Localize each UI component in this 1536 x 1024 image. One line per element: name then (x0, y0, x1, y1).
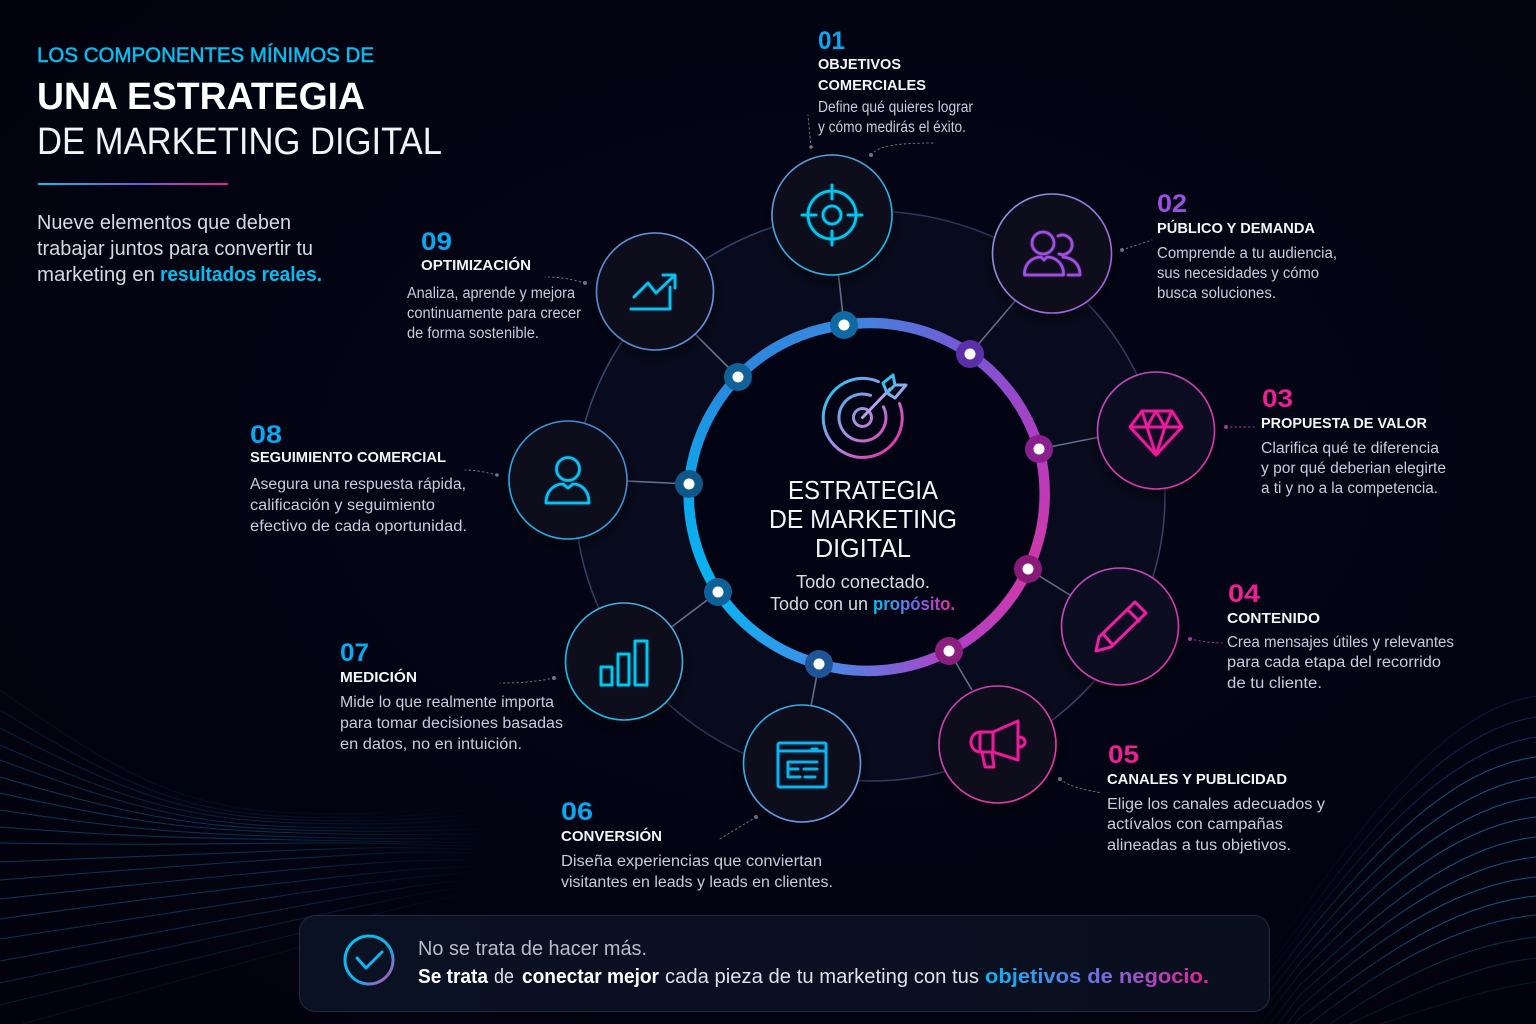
text block: 01: COMERCIALES (818, 77, 926, 94)
icon: check circle (345, 936, 393, 984)
text block: 05 (1107, 741, 1325, 854)
panel: 04 contenido icon (1062, 568, 1178, 685)
text block: 07: para tomar decisiones basadas (340, 715, 563, 732)
header: title block (37, 44, 442, 185)
panel: 06 conversion icon (744, 705, 860, 822)
icon: two users (1024, 232, 1080, 275)
text block: 04 (1227, 580, 1454, 692)
central hub text: DIGITAL (815, 533, 911, 563)
text block: 05: 05 (1108, 741, 1139, 769)
text block: 02: Comprende a tu audiencia, (1157, 245, 1337, 262)
text block: 08: SEGUIMIENTO COMERCIAL (250, 449, 446, 466)
text block: 05: alineadas a tus objetivos. (1107, 837, 1291, 854)
text block: 03: PROPUESTA DE VALOR (1261, 415, 1427, 432)
eyebrow heading: LOS COMPONENTES MÍNIMOS DE (37, 44, 374, 67)
text block: 07: 07 (340, 639, 369, 667)
callout text: cada pieza de tu marketing con tus (665, 966, 979, 988)
text block: 08: Asegura una respuesta rápida, (250, 476, 466, 493)
text block: 08: calificación y seguimiento (250, 497, 435, 514)
icon: pencil (1096, 602, 1146, 651)
panel: 03 propuesta de valor icon (1098, 372, 1214, 489)
text block: 01 (818, 27, 973, 136)
text block: 02: PÚBLICO Y DEMANDA (1157, 219, 1315, 237)
text block: 02: 02 (1157, 190, 1187, 218)
panel: 07 medicion icon (566, 603, 682, 720)
text block: 06: visitantes en leads y leads en clientes. (561, 874, 833, 891)
connector lines hub to icons (626, 270, 1100, 706)
central hub text: DE MARKETING (769, 504, 957, 534)
text block: 07: Mide lo que realmente importa (340, 694, 554, 711)
callout text: conectar mejor (522, 966, 659, 988)
text block: 01: 01 (818, 27, 845, 55)
text block: 02: busca soluciones. (1157, 285, 1276, 302)
icon: crosshair (802, 185, 862, 245)
text block: 07: MEDICIÓN (340, 668, 417, 686)
inner hub background (689, 322, 1045, 670)
title underline (38, 183, 228, 185)
text block: 02 (1157, 190, 1337, 302)
text block: 09: 09 (421, 228, 452, 256)
callout text: de (494, 966, 514, 988)
text block: 03: y por qué deberian elegirte (1261, 460, 1446, 477)
text block: 06: 06 (561, 798, 593, 826)
text block: 01: Define qué quieres lograr (818, 99, 973, 116)
text block: 03 (1261, 385, 1446, 497)
text block: 04: 04 (1228, 580, 1260, 608)
main title regular line: DE MARKETING DIGITAL (37, 121, 442, 163)
icon: browser page (778, 743, 826, 787)
intro paragraph: trabajar juntos para convertir tu (37, 238, 313, 260)
text block: 09: continuamente para crecer (407, 305, 581, 322)
text block: 04: Crea mensajes útiles y relevantes (1227, 634, 1454, 651)
text block: 05: Elige los canales adecuados y (1107, 796, 1325, 813)
outer disc (575, 211, 1165, 781)
intro paragraph: resultados reales. (160, 264, 322, 286)
text block: 05: actívalos con campañas (1107, 816, 1283, 833)
text block: 06 (561, 798, 833, 891)
text block: 09: OPTIMIZACIÓN (421, 256, 531, 274)
text block: 08: efectivo de cada oportunidad. (250, 518, 467, 535)
text block: 06: Diseña experiencias que conviertan (561, 853, 822, 870)
text block: 03: a ti y no a la competencia. (1261, 480, 1438, 497)
icon: megaphone (971, 721, 1025, 767)
text block: 09: Analiza, aprende y mejora (407, 285, 575, 302)
text block: 09: de forma sostenible. (407, 325, 539, 342)
text block: 07 (340, 639, 563, 753)
icon: growth chart (631, 275, 675, 309)
intro paragraph (37, 212, 322, 286)
text block: 09 (407, 228, 581, 342)
text block: 03: Clarifica qué te diferencia (1261, 440, 1439, 457)
panel: bottom callout (300, 916, 1270, 1012)
panel: 08 seguimiento comercial icon (509, 421, 627, 539)
callout text: No se trata de hacer más. (418, 938, 647, 960)
text block: 04: CONTENIDO (1227, 610, 1320, 627)
intro paragraph: marketing en (37, 264, 155, 286)
ring node markers (675, 311, 1053, 678)
central hub text: Todo conectado. (796, 572, 930, 592)
panel: 02 publico y demanda icon (992, 194, 1112, 313)
icon: bar chart (601, 641, 647, 685)
intro paragraph: Nueve elementos que deben (37, 212, 291, 234)
icon: person (546, 458, 589, 503)
text block: 02: sus necesidades y cómo (1157, 265, 1319, 282)
text block: 08 (250, 421, 467, 535)
text block: 07: en datos, no en intuición. (340, 736, 522, 753)
text block: 04: para cada etapa del recorrido (1227, 654, 1441, 671)
central hub text (769, 475, 957, 614)
text block: 04: de tu cliente. (1227, 675, 1322, 692)
central gradient ring (689, 323, 1045, 671)
text block: 08: 08 (250, 421, 282, 449)
icon: diamond (1130, 411, 1182, 455)
central hub text: Todo con un (770, 594, 868, 614)
icon: central target with arrow (823, 375, 906, 457)
callout text: Se trata (418, 966, 489, 988)
panel: 09 optimizacion icon (596, 233, 714, 350)
text block: 05: CANALES Y PUBLICIDAD (1107, 771, 1287, 788)
callout text (418, 938, 1209, 988)
central hub text: ESTRATEGIA (788, 475, 939, 505)
panel: 01 objetivos comerciales icon (772, 155, 892, 275)
text block: 06: CONVERSIÓN (561, 827, 662, 845)
main title bold line: UNA ESTRATEGIA (37, 76, 365, 118)
central hub text: propósito. (873, 594, 955, 614)
text block: 01: OBJETIVOS (818, 56, 901, 73)
text block: 03: 03 (1262, 385, 1293, 413)
callout text: objetivos de negocio. (985, 966, 1209, 988)
panel: 05 canales y publicidad icon (939, 686, 1056, 803)
dotted leader lines (465, 115, 1254, 840)
text block: 01: y cómo medirás el éxito. (818, 119, 966, 136)
